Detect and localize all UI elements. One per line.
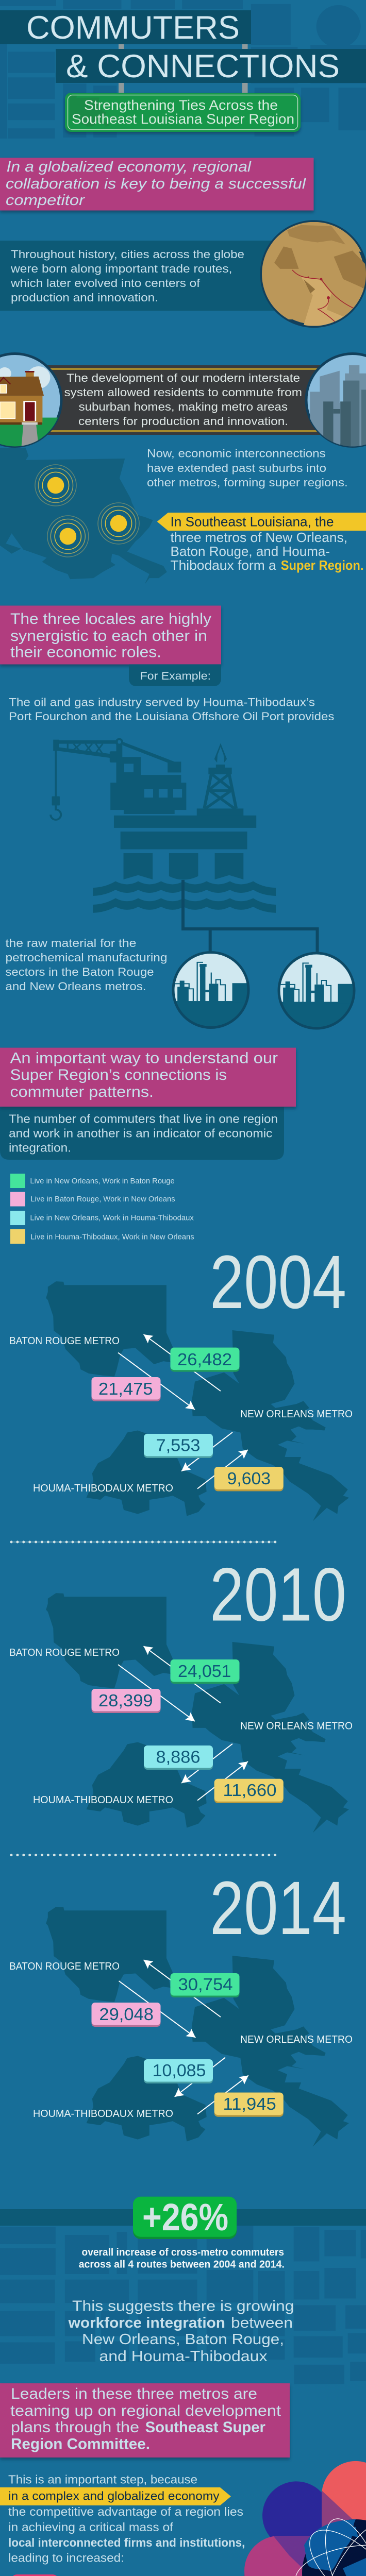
callout: southeast Louisiana super region: Baton Rouge, and Houma- — [170, 544, 330, 559]
callout: southeast Louisiana super region: Thibodaux form a — [170, 557, 276, 573]
callout: regional collaboration: collaboration is key to being a successful — [6, 176, 307, 192]
label: NEW ORLEANS METRO — [240, 1409, 353, 1420]
icon: suburban house circle — [0, 353, 65, 448]
map: metro pieces — [46, 1281, 349, 1521]
panel: trade routes history — [0, 241, 289, 311]
badge: 11,660: 11,660 — [223, 1781, 276, 1800]
panel: integration indicator: integration. — [9, 1141, 71, 1155]
heading: synergistic locales — [0, 606, 221, 665]
text: economic interconnections: Now, economic interconnections — [147, 447, 326, 460]
label: BATON ROUGE METRO — [9, 1335, 120, 1347]
sign posts — [119, 44, 247, 93]
legend: Live in Baton Rouge, Work in New Orleans — [30, 1195, 175, 1204]
panel: integration indicator: The number of commuters that live in one region — [9, 1112, 278, 1125]
badge: 11,945: 11,945 — [223, 2094, 276, 2113]
icon: globe with petals — [244, 2461, 366, 2576]
heading: leaders teaming up — [0, 2383, 290, 2458]
callout: southeast Louisiana super region — [157, 513, 366, 573]
heading: leaders teaming up: Southeast Super — [145, 2419, 265, 2436]
text: raw material: the raw material for the — [5, 937, 136, 950]
item: productivity — [10, 2574, 156, 2576]
panel: interstate system: centers for production and innovation. — [78, 415, 288, 428]
badge: 7,553: 7,553 — [156, 1435, 200, 1455]
badge: 8,886 — [144, 1745, 213, 1770]
petal: cyan — [267, 2555, 366, 2576]
icon: metro marker — [98, 503, 139, 544]
badge: 28,399: 28,399 — [98, 1691, 153, 1710]
title line 2: & CONNECTIONS — [66, 48, 340, 84]
heading: synergistic locales: synergistic to each other in — [10, 628, 207, 645]
badge: 26,482 — [170, 1348, 239, 1372]
divider dots — [11, 1855, 277, 1856]
icon: refinery circle — [171, 951, 251, 1033]
badge: 11,660 — [214, 1779, 284, 1803]
panel: trade routes history: production and innovation. — [11, 291, 158, 304]
label: BATON ROUGE METRO — [9, 1647, 120, 1658]
legend: Live in Houma-Thibodaux, Work in New Orleans — [30, 1233, 194, 1242]
callout: southeast Louisiana super region: three metros of New Orleans, — [170, 530, 347, 545]
callout: regional collaboration: In a globalized economy, regional — [6, 159, 252, 175]
petal overlaps — [273, 2490, 361, 2576]
text: overall increase — [79, 2247, 285, 2270]
icon: trade route map circle — [261, 222, 366, 326]
petal: indigo — [262, 2481, 366, 2576]
badge: 26,482: 26,482 — [177, 1350, 232, 1369]
petal lips — [244, 2541, 366, 2576]
background street pattern: middle — [0, 2209, 366, 2384]
badge: 7,553 — [144, 1434, 213, 1458]
badge: 9,603: 9,603 — [227, 1469, 271, 1488]
label: HOUMA-THIBODAUX METRO — [33, 1794, 173, 1806]
title line 1: COMMUTERS — [26, 10, 240, 46]
heading: commuter patterns: commuter patterns. — [10, 1083, 154, 1100]
arrows — [118, 1334, 248, 1489]
text: important step: the competitive advantage of a region lies — [8, 2505, 243, 2518]
heading: leaders teaming up: Region Committee. — [11, 2436, 150, 2453]
text: raw material: and New Orleans metros. — [5, 980, 146, 993]
map: metro pieces — [46, 1907, 349, 2147]
petal: coral — [322, 2461, 366, 2576]
arrows — [118, 1646, 248, 1801]
panel: interstate system — [41, 365, 325, 435]
map: Louisiana with three metros — [0, 448, 167, 584]
icon: metro marker — [35, 465, 76, 506]
label: HOUMA-THIBODAUX METRO — [33, 1483, 173, 1494]
subtitle highway sign — [65, 93, 301, 132]
subtitle highway sign: Strengthening Ties Across the — [84, 97, 278, 113]
text: workforce integration — [68, 2298, 294, 2365]
badge: 11,945 — [214, 2093, 284, 2117]
legend: Live in New Orleans, Work in Baton Rouge — [30, 1177, 175, 1185]
text: important step: in achieving a critical mass of — [8, 2520, 174, 2534]
badge: 29,048 — [92, 2003, 161, 2027]
text: raw material — [5, 937, 167, 993]
callout: complex economy arrow — [0, 2487, 231, 2505]
panel: trade routes history: which later evolved into centers of — [10, 277, 201, 290]
heading: synergistic locales: The three locales are highly — [10, 611, 211, 628]
legend — [10, 1174, 194, 1244]
label: BATON ROUGE METRO — [9, 1961, 120, 1972]
badge: 8,886: 8,886 — [156, 1748, 200, 1766]
callout: southeast Louisiana super region: In Southeast Louisiana, the — [170, 514, 334, 529]
panel: interstate system: system allowed residents to commute from — [64, 386, 302, 399]
badge: 30,754 — [170, 1973, 239, 1997]
badge: 21,475: 21,475 — [98, 1379, 153, 1398]
text: raw material: petrochemical manufacturing — [5, 951, 167, 964]
heading: leaders teaming up: Leaders in these three metros are — [11, 2385, 257, 2402]
panel: trade routes history: Throughout history, cities across the globe — [11, 248, 244, 261]
heading: leaders teaming up: plans through the — [11, 2419, 139, 2436]
heading: synergistic locales: their economic roles. — [10, 644, 161, 661]
arrows — [119, 1960, 248, 2114]
badge: 24,051: 24,051 — [178, 1662, 231, 1681]
text: economic interconnections: other metros, forming super regions. — [147, 476, 348, 489]
text: workforce integration: and Houma-Thibodaux — [99, 2348, 268, 2365]
text: economic interconnections: have extended past suburbs into — [147, 462, 326, 474]
heading: commuter patterns — [0, 1048, 296, 1107]
callout: regional collaboration: competitor — [6, 192, 86, 209]
callout: regional collaboration — [0, 158, 313, 210]
text: oil and gas industry: The oil and gas industry served by Houma-Thibodaux’s — [9, 696, 315, 709]
heading: commuter patterns: An important way to understand our — [10, 1050, 278, 1067]
icon: refinery circle — [276, 951, 357, 1035]
text: workforce integration: New Orleans, Baton Rouge, — [82, 2331, 284, 2348]
map: metro pieces — [46, 1593, 349, 1833]
text: raw material: sectors in the Baton Rouge — [5, 965, 154, 978]
text: important step: This is an important step, because — [8, 2472, 197, 2486]
icon: metro marker — [47, 516, 89, 557]
petal: yellow — [322, 2571, 366, 2576]
label: NEW ORLEANS METRO — [240, 2034, 353, 2045]
chip: for example: For Example: — [140, 670, 211, 682]
title — [0, 10, 366, 93]
badge: 29,048: 29,048 — [99, 2005, 154, 2024]
chart: 2004 commuter flows — [9, 1240, 353, 1521]
petal: magenta — [244, 2536, 340, 2576]
text: important step: leading to increased: — [8, 2551, 124, 2565]
badge: 28,399 — [92, 1689, 161, 1713]
badge: 21,475 — [92, 1377, 161, 1401]
heading: commuter patterns: Super Region’s connections is — [10, 1066, 227, 1083]
panel: integration indicator — [0, 1107, 284, 1160]
chart: 2014 commuter flows — [9, 1866, 353, 2147]
divider dots — [11, 1541, 277, 1543]
badge: 10,085 — [144, 2059, 213, 2083]
background street pattern: top — [0, 0, 366, 139]
label: HOUMA-THIBODAUX METRO — [33, 2108, 173, 2120]
label: NEW ORLEANS METRO — [240, 1721, 353, 1732]
badge: 10,085: 10,085 — [153, 2061, 206, 2080]
subtitle highway sign: Southeast Louisiana Super Region — [72, 111, 294, 127]
text: overall increase: across all 4 routes between 2004 and 2014. — [79, 2259, 285, 2270]
text: workforce integration: This suggests there is growing — [72, 2298, 294, 2314]
icon: offshore oil rig — [51, 738, 276, 913]
text: oil and gas industry: Port Fourchon and the Louisiana Offshore Oil Port provides — [9, 710, 334, 723]
panel: integration indicator: and work in another is an indicator of economic — [9, 1127, 272, 1140]
panel: interstate system: The development of our modern interstate — [66, 371, 300, 384]
text: economic interconnections — [147, 447, 348, 489]
icon: city skyline circle — [306, 353, 366, 447]
chart: 2010 commuter flows — [9, 1553, 353, 1833]
legend: Live in New Orleans, Work in Houma-Thibodaux — [30, 1214, 194, 1222]
pipeline — [183, 880, 318, 953]
badge: 24,051 — [170, 1659, 239, 1684]
chip: for example — [129, 664, 221, 686]
text: workforce integration: between — [231, 2315, 293, 2331]
text: important step: in a complex and globalized economy — [8, 2489, 220, 2502]
text: workforce integration: workforce integration — [68, 2315, 225, 2331]
globe — [302, 2519, 366, 2576]
text: important step — [0, 2472, 245, 2565]
text: important step: local interconnected firms and institutions, — [8, 2536, 245, 2549]
text: oil and gas industry — [9, 696, 334, 723]
heading: leaders teaming up: teaming up on regional development — [10, 2402, 281, 2419]
stat: +26%: +26% — [142, 2196, 228, 2239]
panel: trade routes history: were born along important trade routes, — [10, 262, 232, 275]
badge: 30,754: 30,754 — [178, 1975, 233, 1994]
badge: 9,603 — [214, 1467, 284, 1491]
panel: interstate system: suburban homes, making metro areas — [79, 400, 288, 413]
text: overall increase: overall increase of cross-metro commuters — [81, 2247, 284, 2258]
